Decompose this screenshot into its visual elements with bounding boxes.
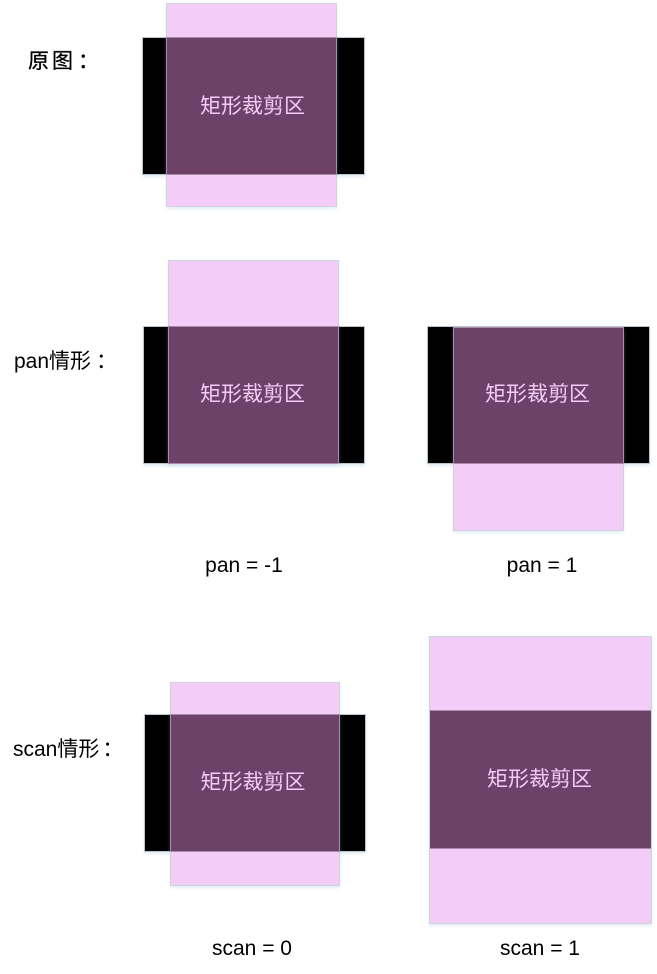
caption: pan 1: pan = 1 — [507, 554, 577, 577]
label: original: 原图： — [28, 50, 102, 73]
caption: scan 1: scan = 1 — [500, 937, 580, 960]
clip label: 矩形裁剪区 — [200, 383, 305, 406]
clip label: 矩形裁剪区 — [485, 383, 590, 406]
label: scan: scan情形： — [13, 738, 123, 761]
black source image — [427, 326, 650, 464]
black source image — [144, 714, 366, 852]
pink output frame — [429, 636, 652, 924]
black source image — [143, 326, 365, 464]
clip region — [170, 714, 340, 852]
clip region — [430, 710, 651, 849]
clip label: 矩形裁剪区 — [200, 771, 306, 794]
black source image — [142, 37, 365, 175]
pink output frame top — [166, 3, 337, 207]
clip label: 矩形裁剪区 — [200, 95, 305, 118]
clip region — [453, 327, 624, 464]
clip region — [168, 326, 339, 464]
caption: pan -1: pan = -1 — [205, 554, 283, 577]
diagram: scan 0 — [143, 682, 367, 889]
label: pan: pan情形： — [14, 350, 117, 373]
diagram: original — [141, 3, 366, 210]
pink output frame — [170, 682, 340, 886]
pink output frame — [453, 327, 624, 531]
pink output frame — [168, 260, 339, 464]
clip label: 矩形裁剪区 — [487, 768, 592, 791]
clip region — [166, 37, 337, 175]
diagram: pan 1 — [426, 326, 651, 534]
diagram: pan -1 — [142, 260, 366, 468]
caption: scan 0: scan = 0 — [212, 937, 292, 960]
diagram: scan 1 — [428, 636, 653, 927]
